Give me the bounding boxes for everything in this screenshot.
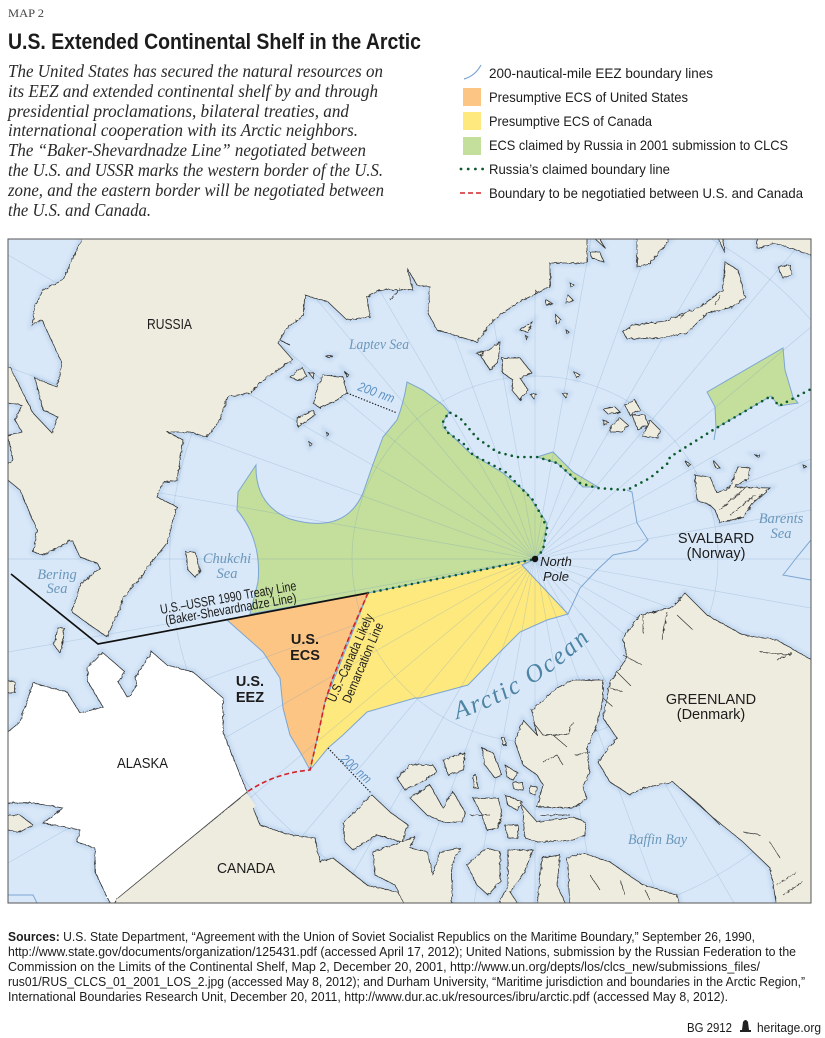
- label: 200 nm north: 200 nm: [355, 378, 397, 406]
- U.S.-Canada boundary: [247, 593, 368, 792]
- label: Chukchi Sea: Chukchi: [203, 551, 251, 567]
- label: U.S. EEZ: EEZ: [236, 690, 264, 706]
- legend: dashed label: Boundary to be negotiatied between U.S. and Canada: [489, 185, 803, 201]
- Alaska-Canada border: [105, 785, 256, 898]
- legend: U.S. swatch: [463, 88, 481, 106]
- label: Barents Sea: Barents: [759, 511, 803, 527]
- label: North Pole: Pole: [543, 569, 569, 584]
- North Pole marker: [532, 556, 538, 562]
- label: Greenland: GREENLAND: [666, 692, 756, 708]
- land: Severnaya Zemlya: [623, 262, 745, 339]
- intro text: The “Baker-Shevardnadze Line” negotiated between: [8, 140, 366, 160]
- map: [8, 240, 810, 902]
- sources: Commission on the Limits of the Continental Shelf, Map 2, December 20, 2001, http://www.un.org/depts/los/clcs_new/submissions_files/: [8, 960, 761, 974]
- land: Greenland: [598, 593, 815, 907]
- sources: rus01/RUS_CLCS_01_2001_LOS_2.jpg (accessed May 8, 2012); and Durham University, “Maritime jurisdiction and boundaries in the Arctic Region,”: [8, 975, 805, 989]
- legend: dashed line: [460, 192, 481, 194]
- label: Svalbard: SVALBARD: [678, 531, 754, 547]
- land: Wrangel Island: [186, 552, 200, 577]
- label: Barents Sea: Sea: [771, 526, 791, 542]
- intro text: the U.S. and USSR marks the western border of the U.S.: [8, 160, 383, 180]
- legend: Russia line label: Russia’s claimed boundary line: [489, 161, 670, 177]
- label: Canada: CANADA: [217, 861, 275, 877]
- intro text: zone, and the eastern border will be negotiated between: [7, 180, 384, 200]
- label: Arctic Ocean: Arctic Ocean: [456, 633, 590, 720]
- label: treaty line: U.S.–USSR 1990 Treaty Line: [159, 578, 297, 617]
- 200 nm dotted lines: [328, 393, 397, 793]
- intro text: presidential proclamations, bilateral treaties, and: [6, 101, 349, 121]
- label: Bering Sea: Bering: [37, 567, 77, 583]
- land: Alaska: [4, 652, 247, 907]
- sources: [8, 930, 805, 1004]
- label: Svalbard: (Norway): [687, 546, 745, 562]
- label: demarcation line: Demarcation Line: [339, 620, 386, 705]
- Baker-Shevardnadze treaty line: [11, 574, 368, 644]
- intro text: its EEZ and extended continental shelf by and through: [8, 81, 378, 101]
- land: East Siberian islands: [290, 356, 349, 446]
- label: Russia: RUSSIA: [147, 316, 192, 333]
- Russia ECS claim: [237, 348, 798, 614]
- sources: International Boundaries Research Unit, December 20, 2011, http://www.dur.ac.uk/resources/ibru/arctic.pdf (accessed May 8, 2012).: [8, 990, 728, 1004]
- legend: EEZ boundary line: [464, 65, 481, 79]
- icon: bell: [740, 1020, 751, 1032]
- map frame: [8, 239, 811, 903]
- legend: Canada swatch: [463, 112, 481, 130]
- land: Svalbard: [695, 467, 770, 523]
- land: Russia: [4, 236, 587, 637]
- label: Laptev Sea: Laptev Sea: [348, 337, 409, 353]
- legend: Russia label: ECS claimed by Russia in 2001 submission to CLCS: [489, 137, 788, 153]
- label: 200 nm south: 200 nm: [337, 751, 375, 786]
- land: Franz Josef Land: [603, 400, 660, 438]
- label: U.S. EEZ: U.S.: [236, 674, 264, 690]
- legend: dotted line: [461, 168, 483, 170]
- land: Canadian Arctic Archipelago: [397, 680, 680, 907]
- label: treaty line: (Baker-Shevardnadze Line): [164, 590, 298, 628]
- label: Baffin Bay: Baffin Bay: [628, 832, 688, 848]
- footer: report number: BG 2912: [687, 1020, 732, 1035]
- footer: [687, 1020, 821, 1035]
- label: Alaska: ALASKA: [117, 756, 168, 772]
- land: New Siberian Islands: [476, 342, 580, 400]
- Canada ECS: [310, 559, 568, 770]
- land: St. Lawrence Island: [54, 628, 64, 653]
- label: Chukchi Sea: Sea: [217, 566, 237, 582]
- label: demarcation line: U.S.–Canada Likely: [324, 611, 377, 704]
- intro text: [6, 61, 384, 220]
- kicker: MAP 2: [8, 8, 44, 20]
- sources: Sources: U.S. State Department, “Agreement with the Union of Soviet Socialist Republics on the Maritime Boundary,” September 26, 1990,: [8, 930, 755, 944]
- U.S. ECS: [227, 593, 368, 770]
- legend: U.S. label: Presumptive ECS of United States: [489, 89, 688, 105]
- label: Bering Sea: Sea: [47, 581, 67, 597]
- EEZ boundaries: [8, 428, 811, 903]
- label: Greenland: (Denmark): [677, 707, 745, 723]
- sources: http://www.state.gov/documents/organization/125431.pdf (accessed April 17, 2012); United Nations, submission by the Russian Federation to the: [8, 945, 796, 959]
- intro text: The United States has secured the natural resources on: [8, 61, 383, 81]
- title: U.S. Extended Continental Shelf in the Arctic: [8, 29, 421, 54]
- legend: Russia swatch: [463, 137, 481, 155]
- footer: site: heritage.org: [757, 1020, 821, 1035]
- label: U.S. ECS: U.S.: [291, 632, 319, 648]
- legend: EEZ label: 200-nautical-mile EEZ boundary lines: [489, 65, 713, 81]
- land: Canada: [112, 793, 405, 907]
- legend: Canada label: Presumptive ECS of Canada: [489, 113, 652, 129]
- intro text: international cooperation with its Arctic neighbors.: [8, 120, 358, 140]
- label: U.S. ECS: ECS: [290, 648, 320, 664]
- label: North Pole: North: [540, 554, 572, 569]
- Russia's claimed boundary: [368, 389, 811, 593]
- legend: [460, 65, 803, 201]
- intro text: the U.S. and Canada.: [8, 200, 151, 220]
- label: Arctic Ocean path: [457, 625, 606, 719]
